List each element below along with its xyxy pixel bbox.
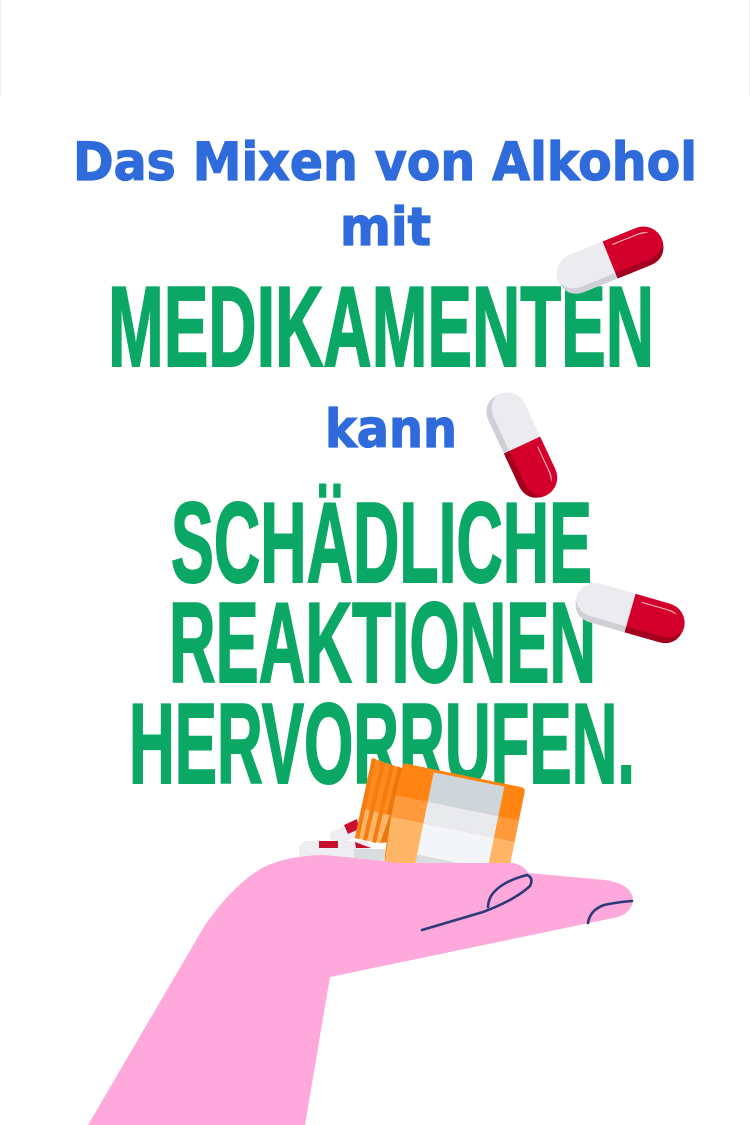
illustration: pink open hand <box>88 855 633 1125</box>
icon: capsule top <box>551 220 669 300</box>
finger crease lines <box>422 875 531 930</box>
label <box>415 772 504 879</box>
icon: capsule middle <box>480 386 564 504</box>
bottle body <box>382 763 525 886</box>
icon: capsule lower <box>571 578 689 648</box>
icon: orange pill bottle <box>355 758 525 886</box>
text: kann: kann <box>325 399 457 460</box>
heading: Das Mixen von Alkohol: Das Mixen von Alkohol <box>73 132 697 193</box>
bottle neck and cap <box>355 758 406 843</box>
text: mit: mit <box>340 197 431 258</box>
icon: spilled pills <box>299 819 385 861</box>
